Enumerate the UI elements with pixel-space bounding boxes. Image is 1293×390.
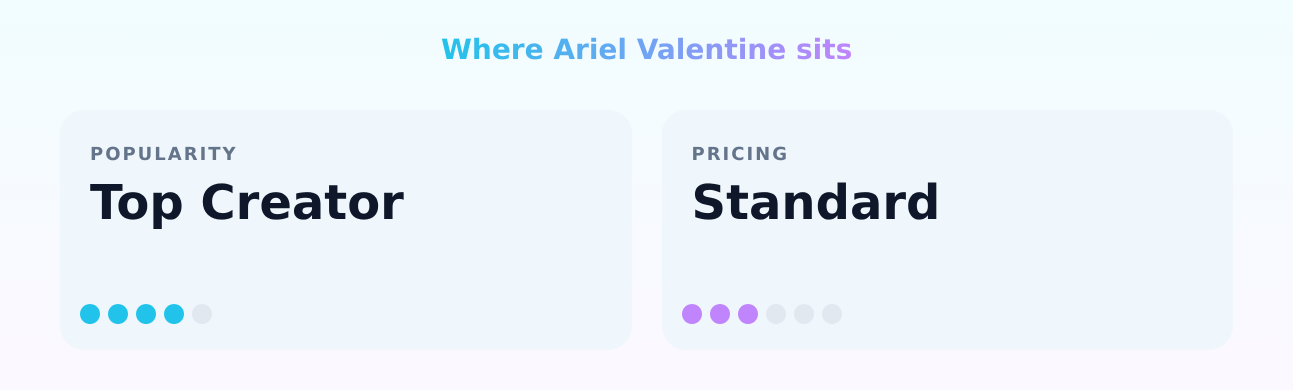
panel: pricing	[662, 110, 1233, 350]
popularity value: Top Creator	[90, 175, 404, 231]
panel: popularity	[60, 110, 632, 350]
popularity label: POPULARITY	[90, 144, 238, 164]
title: Where Ariel Valentine sits	[441, 33, 852, 66]
popularity rating dots: 4 of 5	[80, 304, 212, 324]
pricing value: Standard	[692, 175, 940, 231]
pricing label: PRICING	[692, 144, 789, 164]
pricing rating dots: 3 of 6	[682, 304, 842, 324]
